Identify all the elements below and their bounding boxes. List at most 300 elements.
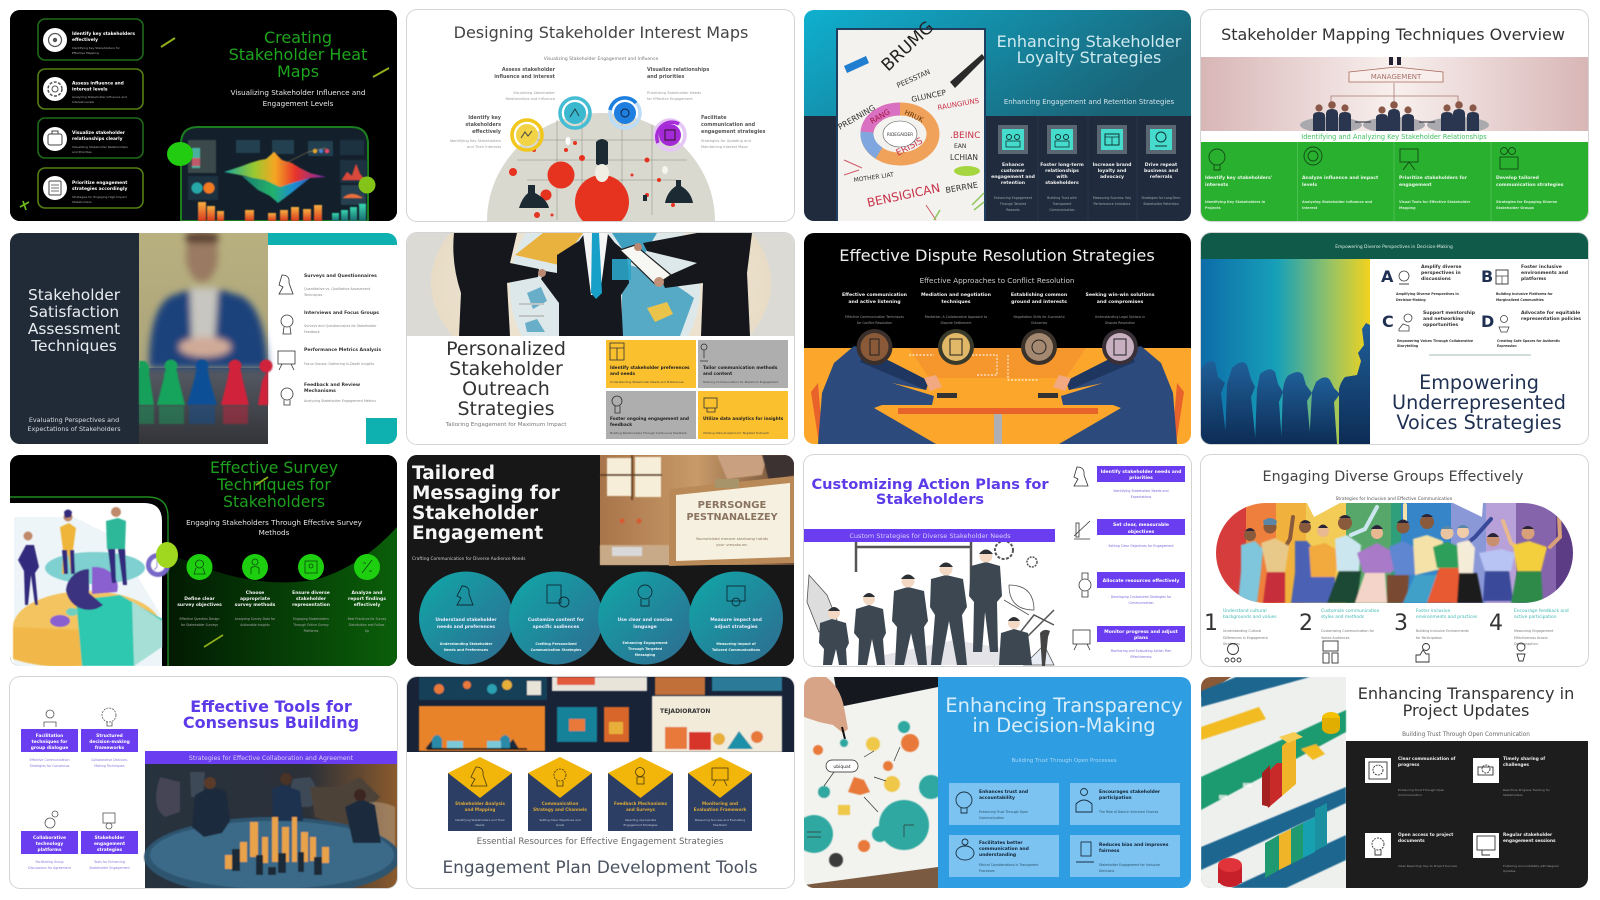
four benefit cards: accountability — [979, 795, 1015, 801]
tool cards: group dialogue — [31, 745, 68, 751]
column dividers — [1038, 116, 1137, 221]
hand and doodle photo: ubiquat — [833, 764, 851, 770]
decorative accent strokes — [20, 38, 389, 210]
four approach labels: and compromises — [1097, 298, 1143, 304]
tool cards — [21, 708, 138, 870]
title — [229, 28, 367, 81]
project board photo — [1201, 677, 1346, 888]
numbered items: Demographics — [1514, 642, 1538, 646]
four benefit cards: Processes — [979, 869, 995, 873]
action buttons with icons: priorities — [1129, 475, 1153, 481]
title: Loyalty Strategies — [1017, 48, 1161, 67]
tool cards: Stakeholder — [95, 835, 125, 841]
doodle photo: ERISIS — [895, 136, 925, 159]
dark update section: challenges — [1503, 762, 1529, 768]
title: in Decision-Making — [972, 714, 1156, 737]
title: Underrepresented — [1392, 390, 1566, 414]
title: Project Updates — [1403, 701, 1529, 720]
item B: environments and — [1521, 270, 1568, 276]
four benefit cards: Enhancing Trust Through Open — [979, 810, 1028, 814]
left title column: Evaluating Perspectives and — [29, 416, 119, 424]
column labels — [177, 590, 386, 608]
title — [811, 476, 1049, 508]
list of four stakeholder cards: Identify key stakeholders — [72, 31, 135, 37]
green strategy band: Develop tailored — [1496, 175, 1539, 181]
green strategy band: Stakeholder Groups — [1496, 206, 1534, 210]
purple banner — [804, 529, 1055, 542]
dark update section: progress — [1398, 762, 1420, 768]
four benefit cards: Decisions — [1099, 869, 1115, 873]
yellow and grey action cards: Understanding Stakeholder Needs and Preferences — [610, 380, 684, 384]
blue panel — [938, 677, 1191, 888]
title — [183, 697, 359, 732]
title: Stakeholder — [449, 358, 563, 380]
four resource cards — [448, 757, 752, 831]
label: identify: effectively — [472, 129, 502, 135]
item C: Support mentorship — [1423, 310, 1476, 316]
four benefit cards: understanding — [979, 852, 1016, 858]
doodle photo: .BEINC — [950, 131, 980, 141]
column labels: loyalty and — [1098, 168, 1126, 174]
action buttons with icons: Monitor progress and adjust — [1104, 629, 1179, 635]
label: assess — [494, 67, 556, 101]
four benefit cards: Ethical Considerations in Transparent — [979, 863, 1039, 867]
column descriptions: Building Trust with — [1047, 196, 1077, 200]
label: visualize: Prioritizing Stakeholder Needs — [647, 91, 701, 95]
doodle photo: RAUNGIUNS — [937, 97, 980, 112]
list of four stakeholder cards: Stakeholders — [72, 200, 92, 204]
photo of sign: Yourseisised mecare starloong hatids — [696, 536, 768, 541]
four benefit cards: fairness — [1099, 848, 1120, 854]
item B: Building Inclusive Platforms for — [1496, 292, 1553, 296]
green strategy band: Prioritize stakeholders for — [1399, 175, 1468, 181]
four teal ovals: Understand stakeholder — [435, 617, 497, 623]
four benefit cards: Stakeholder Engagement for Inclusive — [1099, 863, 1160, 867]
survey items: Feedback and Review — [304, 382, 361, 388]
list of four stakeholder cards: Visualizing Stakeholder Relationships — [72, 145, 128, 149]
yellow and grey action cards: and content — [703, 370, 732, 376]
tool cards: Effective Communication — [29, 758, 70, 762]
column labels: Increase brand — [1093, 162, 1131, 168]
yellow and grey action cards: Tailoring Communication for Maximum Engagement — [702, 380, 779, 384]
dark update section: Clear Reporting: Key to Project Success — [1398, 864, 1457, 868]
silhouettes image — [1201, 258, 1370, 444]
column labels: relationships — [1045, 168, 1079, 174]
dark update section: documents — [1398, 838, 1425, 844]
title: Voices Strategies — [1396, 410, 1562, 434]
four approach labels: and active listening — [848, 298, 901, 304]
subtitle: Essential Resources for Effective Engagement Strategies — [477, 837, 724, 847]
action buttons with icons: plans — [1134, 635, 1148, 641]
numbered items: 3 — [1394, 611, 1408, 636]
panel: Effective Tools for Consensus Building — [10, 677, 397, 888]
four approach descriptions: Understanding Legal Options in — [1095, 314, 1145, 318]
four approach labels: techniques — [941, 298, 971, 304]
label: identify: Identifying Key Stakeholders — [450, 139, 501, 143]
label: visualize: and priorities — [647, 74, 684, 80]
green wave background — [168, 527, 397, 666]
dark update section: Enhancing Trust Through Open — [1398, 788, 1444, 792]
column descriptions: Enhancing Engagement — [994, 196, 1033, 200]
action buttons with icons: Allocate resources effectively — [1103, 578, 1179, 584]
title: Engagement — [412, 523, 543, 544]
label: assess: Assess stakeholder — [502, 67, 556, 73]
survey items: Interviews and Focus Groups — [304, 310, 379, 316]
title — [997, 32, 1182, 67]
green strategy band: Projects — [1205, 206, 1221, 210]
green strategy band: interests — [1205, 182, 1228, 188]
tool cards: decision-making — [89, 739, 130, 745]
column labels: business and — [1144, 168, 1178, 174]
four approach descriptions: Outcomes — [1031, 320, 1047, 324]
title: Personalized — [446, 338, 566, 360]
subtitle: Visualizing Stakeholder Engagement and Influence — [544, 56, 658, 62]
subtitle: Effective Approaches to Conflict Resolution — [920, 276, 1074, 284]
green strategy band: Mapping — [1399, 206, 1416, 210]
panel: Designing Stakeholder Interest Maps — [407, 10, 794, 221]
list of four stakeholder cards: Interest Levels — [72, 100, 94, 104]
item C: Storytelling — [1397, 344, 1419, 348]
subtitle: Engagement Levels — [263, 99, 334, 108]
four teal ovals: Messaging — [635, 653, 656, 657]
label: identify: stakeholders — [465, 122, 501, 128]
survey items: Surveys and Questionnaires — [304, 272, 377, 278]
four teal ovals: language — [633, 624, 657, 630]
survey items: Focus Groups: Gathering In-Depth Insights — [304, 362, 374, 366]
label: visualize: Visualize relationships — [647, 67, 709, 73]
numbered items: 2 — [1299, 611, 1313, 636]
management illustration — [1201, 57, 1588, 142]
item C: C — [1382, 312, 1394, 330]
four ring icons — [512, 98, 685, 150]
purple banner: Strategies for Effective Collaboration and Agreement — [189, 755, 354, 762]
title: Tailored — [412, 463, 495, 484]
title — [412, 463, 561, 544]
list of four stakeholder cards: Identifying Key Stakeholders for — [72, 46, 121, 50]
action buttons with icons: Monitoring and Evaluating Action Plan — [1111, 649, 1171, 653]
list of four stakeholder cards: Effective Mapping — [72, 51, 99, 55]
item C: opportunities — [1423, 322, 1458, 328]
column labels: with — [1056, 174, 1068, 180]
tool cards: platforms — [38, 847, 62, 853]
label: assess: Visualizing Stakeholder — [513, 91, 556, 95]
item D: representation policies — [1521, 316, 1581, 322]
four resource cards: Selecting Appropriate — [625, 818, 656, 822]
doodle photo: BRUMG — [878, 18, 938, 76]
list of four stakeholder cards — [38, 19, 143, 208]
label: facilitate: Facilitate — [701, 115, 727, 121]
column labels: Define clear — [184, 596, 216, 602]
doodle photo — [836, 18, 986, 221]
item D: Expression — [1497, 344, 1517, 348]
column descriptions: Effective Question Design — [180, 617, 220, 621]
title: Effective Tools for — [190, 697, 352, 716]
numbered items: Varied Audiences — [1321, 636, 1350, 640]
list of four stakeholder cards: Analyzing Stakeholder Influence and — [72, 95, 127, 99]
title: Strategies — [457, 398, 555, 420]
yellow and grey action cards: Identify stakeholder preferences — [610, 364, 690, 370]
action buttons with icons: Set clear, measurable — [1113, 522, 1169, 528]
subtitle: Visualizing Stakeholder Influence and — [231, 88, 365, 97]
action buttons with icons: Communication — [1128, 601, 1154, 605]
item D: Creating Safe Spaces for Authentic — [1497, 338, 1560, 342]
doodle photo: PRERNING — [836, 103, 877, 132]
list of four stakeholder cards: strategies accordingly — [72, 186, 127, 192]
item D — [1481, 310, 1581, 348]
green strategy band — [1201, 142, 1588, 221]
panel: Engagement Plan Development Tools — [407, 677, 794, 888]
column descriptions: Analyzing Survey Data for — [235, 617, 276, 621]
column descriptions: Communication — [1049, 208, 1075, 212]
panel: Engaging Diverse Groups Effectively — [1201, 455, 1588, 666]
panel: Effective Survey Techniques for Stakeholders — [10, 455, 397, 666]
yellow and grey action cards: feedback — [610, 422, 632, 428]
title — [945, 694, 1183, 737]
survey items: Analyzing Stakeholder Engagement Metrics — [304, 398, 376, 402]
doodle photo: EAN — [954, 143, 966, 150]
column descriptions: Engaging Stakeholders — [293, 617, 329, 621]
title: Creating — [264, 28, 332, 47]
panel: Enhancing Transparency in Decision-Making — [804, 677, 1191, 888]
panel: Effective Dispute Resolution Strategies — [804, 232, 1191, 444]
lamp illustration — [487, 113, 715, 329]
title: Effective Dispute Resolution Strategies — [839, 246, 1155, 264]
panel: Empowering Underrepresented Voices Strategies — [1201, 232, 1588, 444]
action buttons with icons: Effectiveness — [1130, 655, 1152, 659]
left title column: Stakeholder — [28, 286, 121, 304]
photo of sign: PESTNANALEZEY — [686, 512, 779, 523]
subtitle: Identifying and Analyzing Key Stakeholder Relationships — [1301, 133, 1487, 141]
title — [1358, 684, 1574, 720]
four teal ovals: Understanding Stakeholder — [440, 642, 493, 646]
column labels: Foster long-term — [1040, 162, 1084, 168]
tool cards: Collaborative — [33, 835, 66, 841]
numbered items: backgrounds and values — [1223, 614, 1277, 620]
column labels: Analyze and — [352, 590, 382, 596]
subtitle: Engaging Stakeholders Through Effective Survey — [186, 518, 363, 527]
four resource cards: and Mapping — [465, 807, 495, 812]
four teal ovals: Measure impact and — [710, 617, 762, 623]
four approach labels: Seeking win-win solutions — [1085, 292, 1155, 298]
purple banner — [145, 751, 397, 764]
dark update section: Fostering Accountability with Regular — [1503, 864, 1560, 868]
dark update section — [1346, 741, 1588, 888]
four resource cards: Setting Clear Objectives and — [539, 818, 581, 822]
column labels: survey methods — [235, 602, 276, 608]
subtitle — [231, 88, 365, 108]
column descriptions: Through Tailored — [999, 202, 1026, 206]
column labels: advocacy — [1100, 174, 1124, 180]
label: identify: and Their Interests — [467, 145, 501, 149]
four approach descriptions: for Conflict Resolution — [857, 320, 892, 324]
title: Engagement Plan Development Tools — [442, 857, 758, 877]
four icon tiles — [998, 125, 1176, 154]
four benefit cards: Enhances trust and — [979, 789, 1028, 795]
title: Effective Survey — [210, 458, 338, 477]
subtitle: Crafting Communication for Diverse Audience Needs — [412, 556, 526, 562]
action buttons with icons: objectives — [1128, 529, 1154, 535]
column descriptions: Rewards — [1006, 208, 1020, 212]
column labels: effectively — [354, 602, 380, 608]
tool cards: Stakeholder Engagement — [89, 866, 130, 870]
photo of sign — [600, 455, 794, 566]
label: assess: influence and interest — [494, 74, 556, 80]
four resource cards: Needs — [475, 823, 485, 827]
four teal ovals — [419, 572, 783, 664]
four teal ovals: needs and preferences — [437, 624, 495, 630]
four resource cards: Engagement Strategies — [623, 823, 658, 827]
title: Outreach — [462, 378, 550, 400]
item A: perspectives in — [1421, 270, 1461, 276]
crowd illustration in pill shape — [1216, 503, 1573, 603]
numbered items: active participation — [1514, 614, 1557, 620]
four approach descriptions: Mediation: A Collaborative Approach to — [925, 314, 987, 318]
yellow and grey action cards: Utilize data analytics for insights — [703, 416, 784, 422]
title: Consensus Building — [183, 713, 359, 732]
survey items: Performance Metrics Analysis — [304, 346, 381, 352]
four resource cards: Identifying Stakeholders and Their — [455, 818, 506, 822]
dark update section: Open access to project — [1398, 832, 1453, 838]
four resource cards: Feedback Mechanisms — [614, 801, 667, 806]
numbered items — [1204, 608, 1569, 663]
subtitle: Enhancing Engagement and Retention Strategies — [1004, 98, 1175, 106]
tool cards: Facilitation — [36, 733, 63, 739]
item B: platforms — [1521, 276, 1546, 282]
title: Stakeholder Mapping Techniques Overview — [1221, 25, 1565, 44]
panel: Customizing Action Plans for Stakeholders — [804, 455, 1191, 666]
green strategy band: Analyzing Stakeholder Influence and — [1302, 200, 1373, 204]
panel: Tailored Messaging for Stakeholder Engagement — [407, 455, 794, 666]
list of four stakeholder cards: and Priorities — [72, 150, 92, 154]
tool cards: engagement — [94, 841, 125, 847]
numbered items: Measuring Engagement — [1514, 629, 1554, 633]
dark update section: Regular stakeholder — [1503, 832, 1553, 838]
four resource cards: Goals — [556, 823, 565, 827]
item B: Foster inclusive — [1521, 264, 1562, 270]
panel: Stakeholder Satisfaction Assessment Techniques — [10, 232, 397, 444]
four benefit cards: Communication — [979, 816, 1004, 820]
four approach labels: Effective communication — [842, 292, 907, 298]
four approach descriptions: Dispute Resolution — [1105, 320, 1135, 324]
four resource cards: Communication — [542, 801, 578, 806]
hand and doodle photo — [795, 677, 943, 888]
title: Enhancing Transparency in — [1358, 684, 1574, 703]
column descriptions: Measuring Success: Key — [1093, 196, 1131, 200]
column descriptions: Best Practices for Survey — [348, 617, 387, 621]
column labels: report findings — [348, 596, 386, 602]
item D: Advocate for equitable — [1521, 310, 1580, 316]
numbered items: Building Inclusive Environments — [1416, 629, 1469, 633]
numbered items: Differences in Engagement — [1223, 636, 1269, 640]
dark update section: engagement sessions — [1503, 838, 1556, 844]
four teal ovals: adjust strategies — [714, 624, 758, 630]
negotiators at table illustration — [811, 346, 1184, 444]
green strategy band: engagement — [1399, 182, 1432, 188]
framed survey illustration — [10, 497, 178, 667]
item D: D — [1481, 312, 1494, 330]
four teal ovals: specific audiences — [533, 624, 580, 630]
title: Techniques for — [216, 475, 331, 494]
four teal ovals: Through Targeted — [628, 647, 663, 651]
doodle photo: BENSIGICAN — [866, 181, 941, 210]
column labels: Choose — [246, 590, 264, 596]
left title column: Satisfaction — [29, 302, 119, 320]
title: Stakeholders — [876, 491, 984, 508]
numbered items: Understanding Cultural — [1223, 629, 1261, 633]
four approach descriptions — [845, 314, 1145, 324]
management illustration: MANAGEMENT — [1371, 73, 1422, 81]
column descriptions: Transparent — [1052, 202, 1072, 206]
panel: Stakeholder Mapping Techniques Overview — [1201, 10, 1588, 221]
illustration of business team — [807, 541, 1054, 666]
column descriptions: Actionable Insights — [240, 623, 270, 627]
action buttons with icons — [1073, 466, 1185, 659]
column labels: survey objectives — [177, 602, 222, 608]
title: Messaging for — [412, 483, 561, 504]
column labels: Ensure diverse — [292, 590, 330, 596]
title: Designing Stakeholder Interest Maps — [454, 23, 748, 42]
column descriptions — [994, 196, 1180, 212]
title: Empowering — [1419, 370, 1539, 394]
left title column: Assessment — [28, 320, 120, 338]
doodle photo: GLUNCEP — [911, 88, 947, 104]
list of four stakeholder cards: Assess influence and — [72, 80, 124, 86]
doodle photo: PEESSTAN — [896, 68, 931, 90]
column descriptions: Distribution and Follow- — [349, 623, 385, 627]
doodle photo: RIDEGAIDER — [887, 132, 913, 137]
four benefit cards: participation — [1099, 795, 1132, 801]
four teal ovals: Measuring Impact of — [716, 642, 756, 646]
survey items — [278, 272, 381, 404]
header band — [1201, 232, 1588, 258]
item B: B — [1481, 266, 1493, 286]
panel: Personalized Stakeholder Outreach Strategies — [407, 232, 794, 444]
subtitle: Methods — [259, 528, 290, 537]
column labels: retention — [1001, 180, 1025, 186]
dark update section: Communication — [1398, 793, 1422, 797]
label: facilitate: communication and — [701, 122, 756, 128]
numbered items: styles and methods — [1321, 614, 1365, 620]
subtitle: Building Trust Through Open Communication — [1402, 732, 1530, 738]
doodle photo: LCHIAN — [950, 153, 978, 162]
title — [210, 458, 338, 511]
tool cards: Collaborative Decision- — [91, 758, 128, 762]
subtitle: Building Trust Through Open Processes — [1011, 758, 1117, 764]
label: facilitate: engagement strategies — [701, 129, 765, 135]
column labels: engagement and — [991, 174, 1035, 180]
four round icons — [856, 328, 1138, 364]
yellow and grey action cards: Building Relationships Through Continuous Feedback — [610, 430, 687, 434]
title: Stakeholder Heat — [229, 45, 367, 64]
column descriptions: Up — [365, 629, 369, 633]
action buttons with icons: Identifying Stakeholder Needs and — [1113, 489, 1169, 493]
doodle photo: HRUK — [903, 109, 925, 124]
photo of sign: PERRSONGE — [698, 500, 767, 511]
four approach labels: ground and interests — [1011, 298, 1067, 304]
numbered items: Foster inclusive — [1416, 608, 1450, 614]
column descriptions: Through Online Survey — [292, 623, 329, 627]
four resource cards: Evaluation Framework — [694, 807, 747, 812]
numbered items: Customizing Communication for — [1321, 629, 1375, 633]
numbered items: Customize communication — [1321, 608, 1380, 614]
column descriptions: Strategies for Long-Term — [1142, 196, 1180, 200]
teal accent shapes — [268, 232, 397, 444]
yellow and grey action cards: Tailor communication methods — [703, 364, 778, 370]
title: Stakeholders — [223, 492, 325, 511]
four teal ovals: Needs and Preferences — [444, 648, 488, 652]
column descriptions: Platforms — [304, 629, 319, 633]
green strategy band: Identify key stakeholders' — [1205, 175, 1272, 181]
